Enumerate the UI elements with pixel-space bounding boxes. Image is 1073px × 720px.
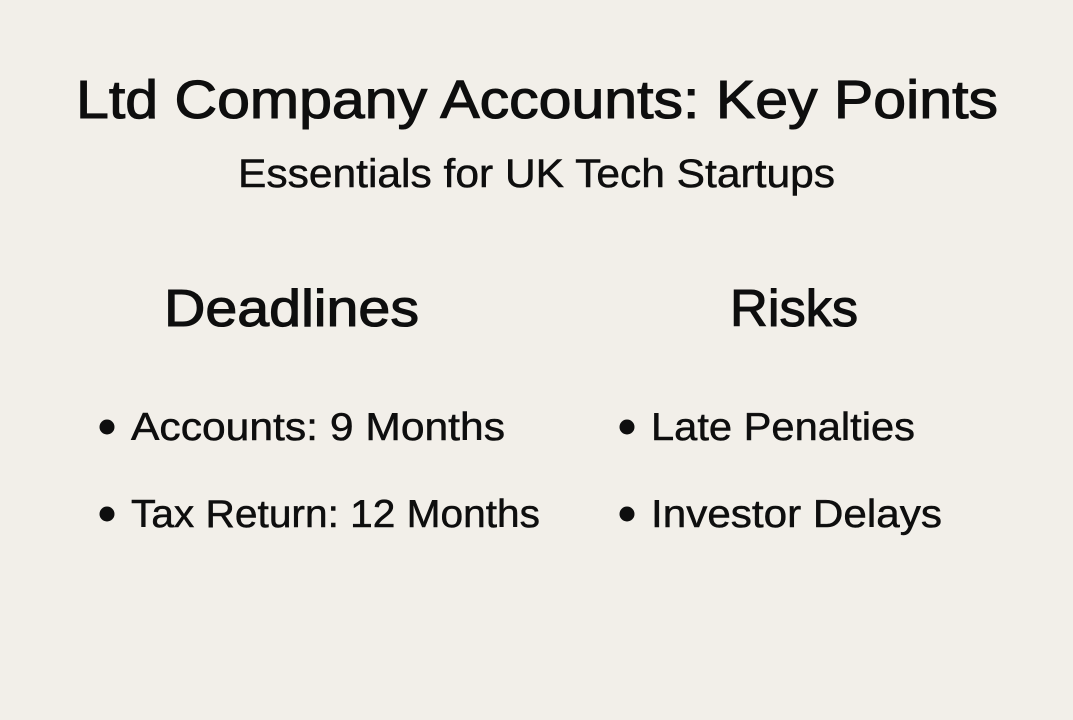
list item: investor delays: Investor Delays xyxy=(651,493,942,536)
list item: late penalties: Late Penalties xyxy=(651,406,915,449)
list item: accounts deadline: Accounts: 9 Months xyxy=(131,406,505,449)
subtitle: Essentials for UK Tech Startups xyxy=(238,152,835,196)
heading: risks: Risks xyxy=(730,280,858,338)
panel: deadlines xyxy=(100,280,540,536)
list item: tax return deadline: Tax Return: 12 Months xyxy=(131,493,540,536)
panel: risks xyxy=(620,280,942,536)
heading: deadlines: Deadlines xyxy=(164,280,419,338)
title: Ltd Company Accounts: Key Points xyxy=(76,70,998,130)
